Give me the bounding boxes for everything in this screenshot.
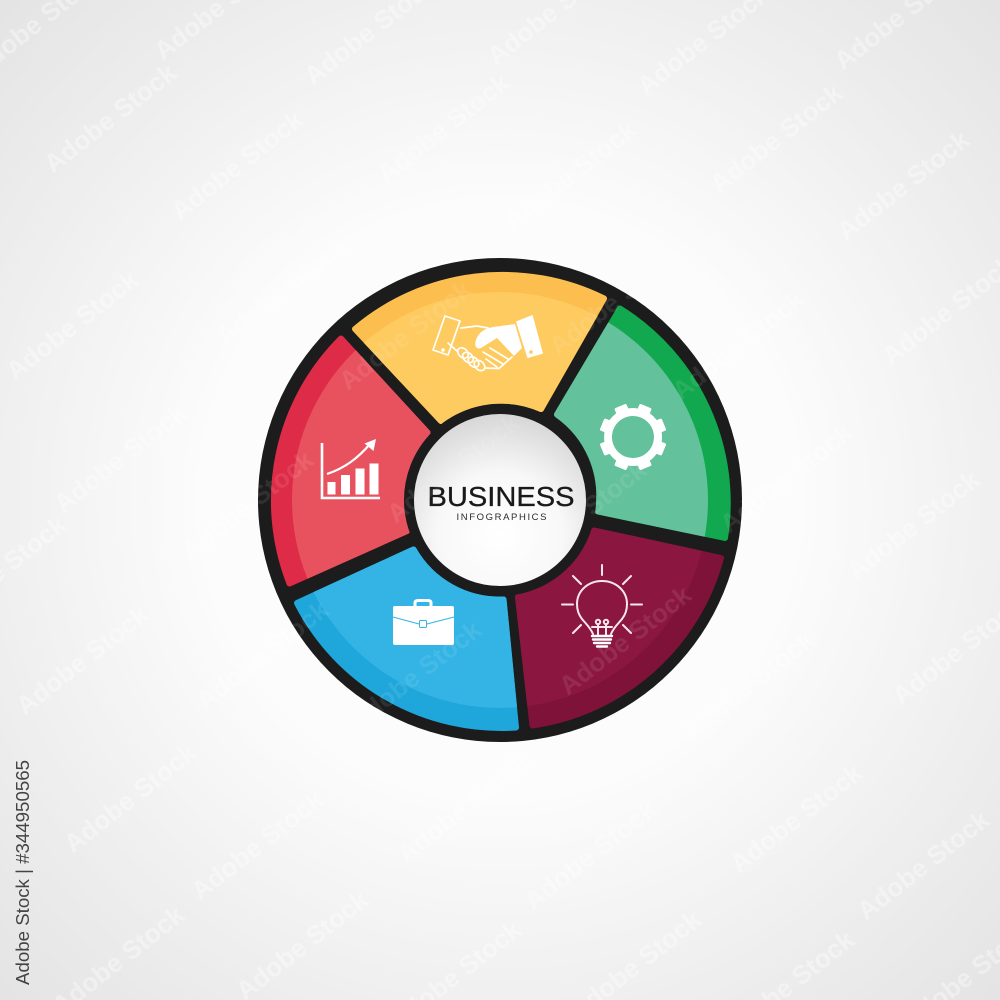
wheel outer black disc xyxy=(258,258,742,742)
segment: red xyxy=(270,336,430,586)
segment: maroon xyxy=(515,528,724,728)
watermarks: Adobe Stock xyxy=(38,57,182,179)
watermarks: Adobe Stock xyxy=(210,229,354,351)
subtitle: infographics: INFOGRAPHICS xyxy=(456,512,546,523)
center hub xyxy=(409,409,591,591)
segment: blue xyxy=(294,546,519,731)
watermarks over wheel: Adobe Stock xyxy=(508,454,652,576)
watermarks: Adobe Stock xyxy=(724,757,868,879)
watermarks: Adobe Stock xyxy=(851,804,995,926)
icon: gear xyxy=(600,404,666,470)
watermarks: Adobe Stock xyxy=(704,77,848,199)
watermarks: Adobe Stock xyxy=(185,784,329,906)
watermarks over wheel: Adobe Stock xyxy=(543,239,687,361)
watermarks over wheel xyxy=(175,229,858,746)
watermarks over wheel: Adobe Stock xyxy=(553,579,697,701)
watermarks over wheel: Adobe Stock xyxy=(381,407,525,529)
icon: briefcase xyxy=(393,600,454,645)
watermarks: Adobe Stock xyxy=(676,624,820,746)
watermarks: Adobe Stock xyxy=(831,124,975,246)
segment: yellow xyxy=(352,272,607,424)
watermarks: Adobe Stock xyxy=(0,264,144,386)
watermarks: Adobe Stock xyxy=(190,594,334,716)
icon: growth chart xyxy=(322,439,380,498)
watermarks over wheel: Adobe Stock xyxy=(175,444,319,566)
title: business: BUSINESS xyxy=(428,481,574,512)
watermarks: Adobe Stock xyxy=(165,104,309,226)
watermarks over wheel: Adobe Stock xyxy=(190,594,334,716)
watermarks: Adobe Stock xyxy=(175,444,319,566)
icon: handshake xyxy=(433,316,542,373)
watermarks over wheel: Adobe Stock xyxy=(210,229,354,351)
watermarks over wheel: Adobe Stock xyxy=(333,274,477,396)
watermarks: Adobe Stock xyxy=(391,747,535,869)
segment: green xyxy=(554,306,731,541)
stock id label: Adobe Stock | #344950565 xyxy=(13,760,33,985)
watermarks: Adobe Stock xyxy=(841,464,985,586)
watermarks: Adobe Stock xyxy=(714,417,858,539)
icon: light bulb xyxy=(562,565,642,646)
wheel xyxy=(258,258,742,742)
watermarks over wheel: Adobe Stock xyxy=(714,417,858,539)
watermarks over wheel: Adobe Stock xyxy=(666,284,810,406)
watermarks: Adobe Stock xyxy=(518,794,662,916)
watermarks: Adobe Stock xyxy=(58,737,202,859)
watermarks: Adobe Stock xyxy=(48,397,192,519)
watermarks over wheel: Adobe Stock xyxy=(343,614,487,736)
watermarks: Adobe Stock xyxy=(10,599,154,721)
watermarks: Adobe Stock xyxy=(371,67,515,189)
watermarks: Adobe Stock xyxy=(498,114,642,236)
watermarks over wheel: Adobe Stock xyxy=(676,624,820,746)
watermarks: Adobe Stock xyxy=(666,284,810,406)
